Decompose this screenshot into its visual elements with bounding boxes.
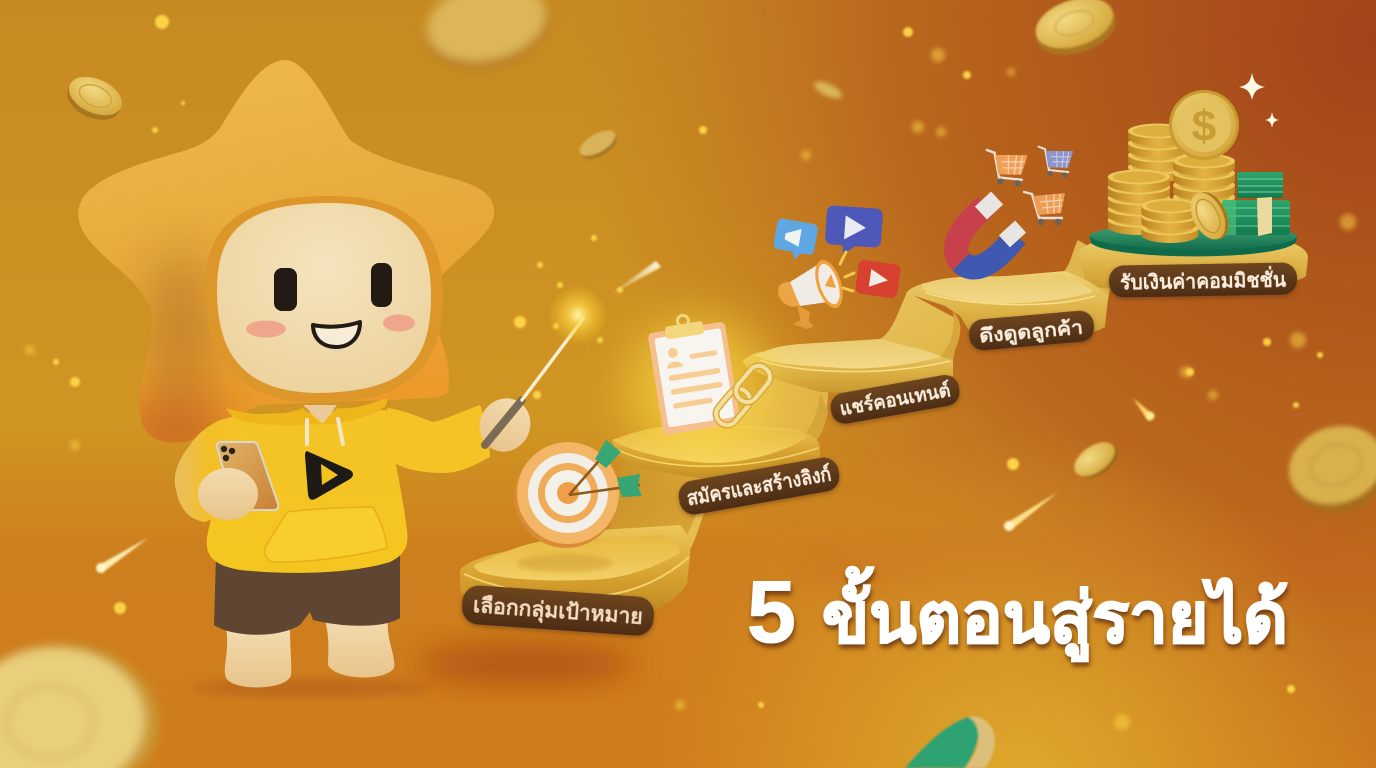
label: step 1 (461, 584, 655, 637)
cart orange two (1024, 192, 1065, 225)
tilted coin (1184, 186, 1236, 246)
title (747, 562, 1288, 662)
streak: left (96, 538, 148, 573)
blue bubble (772, 218, 819, 262)
riser 2 to 3 (720, 368, 830, 444)
label: step 1: เลือกกลุ่มเป้าหมาย (472, 593, 644, 631)
character: star mascot (60, 50, 608, 687)
staircase (460, 223, 1308, 625)
cheeks (246, 314, 415, 338)
clipboard (646, 309, 741, 435)
right arm (387, 405, 490, 473)
label: step 3: แชร์คอนเทนต์ (838, 379, 952, 420)
hoodie logo (305, 451, 353, 500)
big dollar coin (1169, 90, 1239, 160)
icon: magnet and carts (956, 147, 1073, 268)
magnet (956, 199, 1018, 268)
shorts (214, 555, 400, 635)
label: step 4 (968, 310, 1095, 351)
step 1 (460, 525, 690, 625)
icon: target with arrows (514, 440, 642, 548)
icon: social media and megaphone (772, 205, 901, 329)
drawstrings (307, 419, 343, 444)
red play (855, 259, 901, 299)
front stack (1142, 198, 1198, 243)
phone (217, 442, 278, 510)
legs (225, 620, 394, 687)
neck (303, 405, 337, 424)
purple bubble (824, 205, 883, 257)
streak: right small (1133, 398, 1155, 421)
sparkles (1239, 73, 1279, 128)
label: step 5 (1109, 262, 1297, 298)
collar (227, 398, 387, 425)
label: step 2: สมัครและสร้างลิงก์ (685, 462, 833, 510)
label: step 5: รับเงินค่าคอมมิชชั่น (1120, 265, 1287, 294)
pointer stick (485, 285, 608, 445)
step 5 riser and podium (1058, 223, 1308, 300)
cash upper (1237, 172, 1283, 198)
streak: right centre (1004, 492, 1058, 531)
face (217, 203, 431, 393)
hood rim (205, 196, 443, 403)
title: 5 (747, 562, 796, 661)
megaphone (778, 252, 854, 329)
hoodie body (207, 410, 407, 573)
step 4 (906, 271, 1108, 342)
chain link (712, 362, 774, 429)
eyes (274, 263, 392, 311)
icon: clipboard and link (628, 309, 774, 462)
left hand (198, 468, 258, 520)
label: step 3 (828, 373, 962, 426)
streak: top (605, 261, 661, 298)
left arm (175, 417, 250, 522)
big dollar coin: $ (1192, 102, 1216, 151)
cart orange one (983, 150, 1028, 187)
right hand (471, 390, 539, 460)
riser 3 to 4 (850, 292, 960, 366)
mouth (313, 322, 360, 347)
step 2 (612, 424, 820, 478)
title: ขั้นตอนสู่รายได้ (822, 566, 1288, 662)
cash bundle (1222, 197, 1290, 236)
right stack (1173, 154, 1235, 212)
step 3 (742, 339, 953, 393)
star head (78, 60, 494, 442)
icon: coin stacks and cash (1108, 90, 1290, 246)
label: step 4: ดึงดูดลูกค้า (978, 317, 1084, 348)
left stack (1108, 170, 1170, 235)
back stack (1128, 124, 1188, 182)
cart purple (1036, 147, 1073, 178)
riser 1 to 2 (600, 457, 704, 556)
